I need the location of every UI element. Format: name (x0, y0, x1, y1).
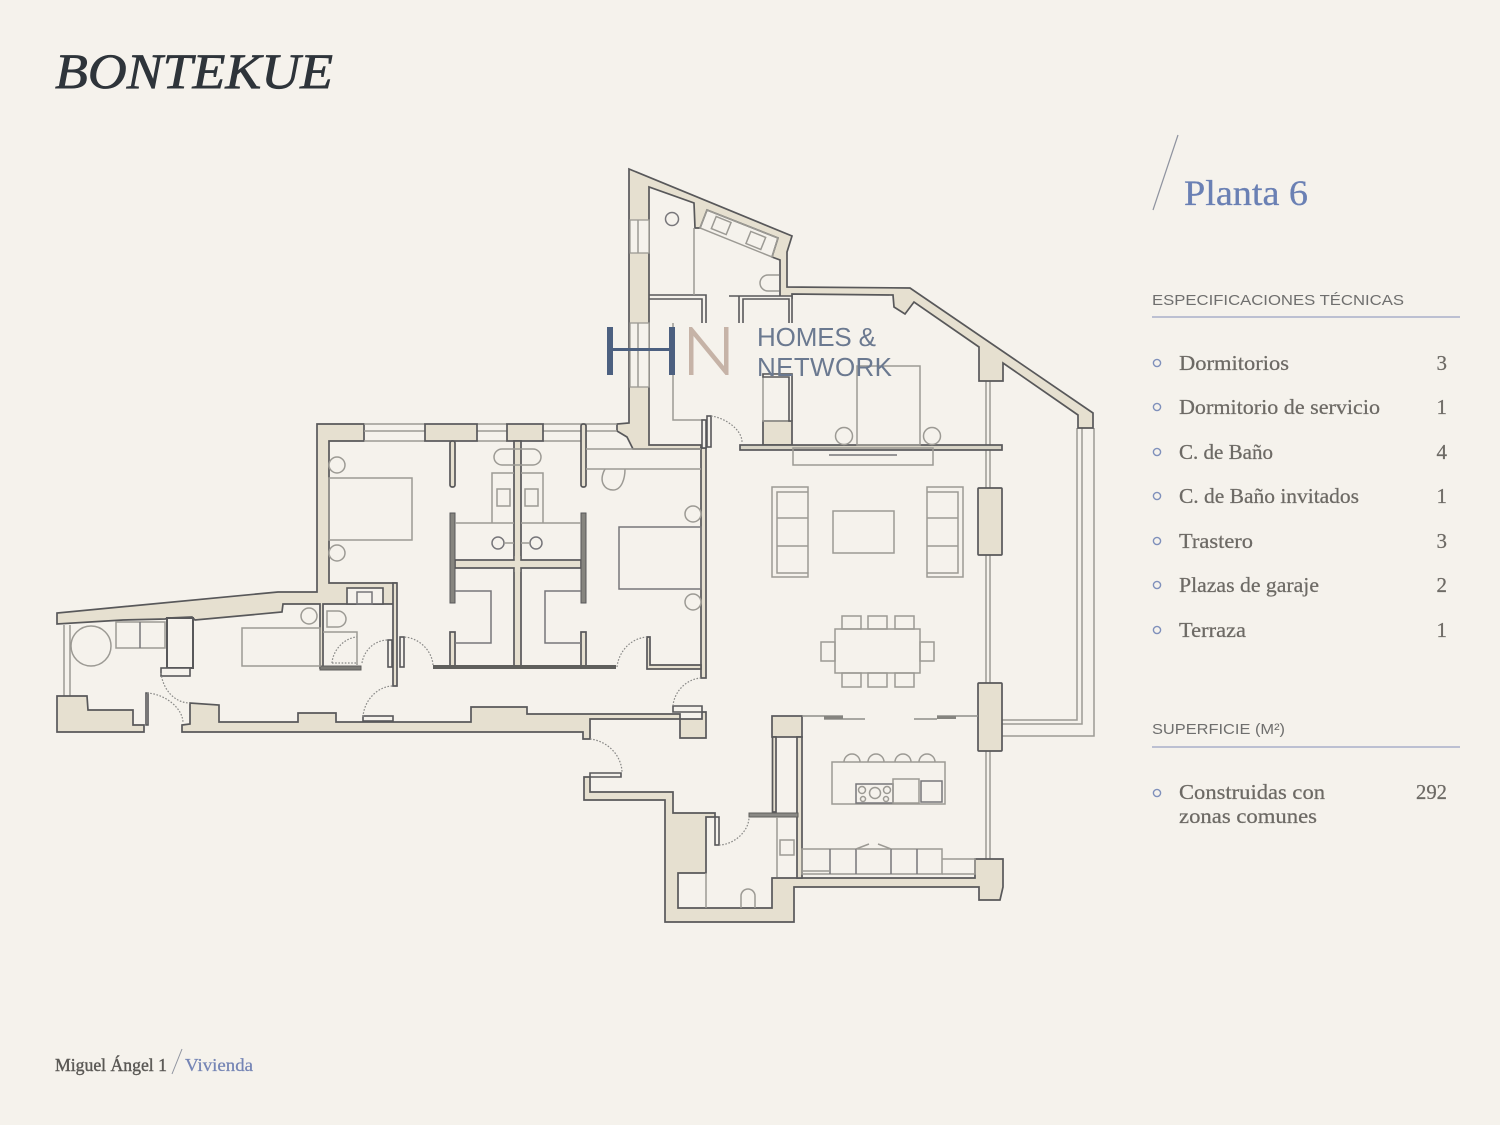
watermark logo: Homes & Network (607, 322, 893, 382)
logo mark letter H (607, 327, 675, 375)
row: Dormitorios: 3 (1436, 351, 1447, 375)
row: C. de Baño invitados: C. de Baño invitados (1179, 484, 1359, 508)
row: Dormitorio de servicio (1153, 395, 1447, 419)
row: Dormitorios: Dormitorios (1179, 351, 1289, 375)
panel: superficie (1152, 721, 1460, 828)
row: Plazas de garaje: Plazas de garaje (1179, 573, 1319, 597)
living room furniture (772, 448, 963, 577)
logo mark letter N (689, 327, 728, 375)
section heading: SUPERFICIE (M²) (1152, 721, 1285, 738)
southern corridor walls (57, 696, 706, 777)
row: Trastero: 3 (1436, 529, 1447, 553)
south block walls (584, 716, 1003, 922)
row: C. de Baño invitados (1153, 484, 1447, 508)
row: Construidas con zonas comunes: 292 (1416, 780, 1447, 804)
heading slash (1153, 135, 1178, 210)
row: Dormitorio de servicio: 1 (1436, 395, 1447, 419)
footer address: Miguel Ángel 1 (55, 1054, 167, 1075)
heading text: Planta 6 (1184, 173, 1308, 213)
row: Construidas con zonas comunes: Construidas con (1179, 780, 1326, 804)
section heading: ESPECIFICACIONES TÉCNICAS (1152, 292, 1404, 309)
row: Plazas de garaje: 2 (1436, 573, 1447, 597)
north wing walls (617, 169, 1093, 450)
row: Dormitorios (1153, 351, 1447, 375)
living room walls and sliding doors (802, 488, 1002, 751)
row: Terraza (1153, 618, 1447, 642)
bedroom and bath fittings (64, 449, 701, 696)
row: C. de Baño: C. de Baño (1179, 440, 1273, 464)
west bedroom wing walls (57, 424, 404, 725)
window walls north of bedrooms (364, 416, 711, 678)
north wing fittings (666, 210, 940, 445)
row: Trastero: Trastero (1179, 529, 1253, 553)
floor plan (57, 169, 1094, 922)
row: C. de Baño: 4 (1436, 440, 1448, 464)
kitchen fittings (802, 754, 975, 874)
door swings (147, 416, 749, 845)
row: Construidas con zonas comunes: zonas comunes (1179, 804, 1317, 828)
panel: especificaciones técnicas (1152, 292, 1460, 642)
logo wordmark: NETWORK (757, 352, 893, 382)
footer category: Vivienda (185, 1055, 253, 1075)
row: Terraza: Terraza (1179, 618, 1247, 642)
row: C. de Baño (1153, 440, 1448, 464)
logo wordmark: HOMES & (757, 322, 876, 352)
row: Trastero (1153, 529, 1447, 553)
row: Dormitorio de servicio: Dormitorio de servicio (1179, 395, 1380, 419)
brand logo: BONTEKUE: BONTEKUE (55, 43, 333, 99)
footer (55, 1049, 253, 1075)
heading: Planta 6 (1153, 135, 1308, 213)
dining table (821, 616, 934, 687)
row: Plazas de garaje (1153, 573, 1447, 597)
row: Construidas con zonas comunes (1153, 780, 1447, 828)
row: C. de Baño invitados: 1 (1436, 484, 1447, 508)
row: Terraza: 1 (1436, 618, 1447, 642)
terrace lines east (986, 381, 1094, 859)
footer slash (172, 1049, 182, 1074)
